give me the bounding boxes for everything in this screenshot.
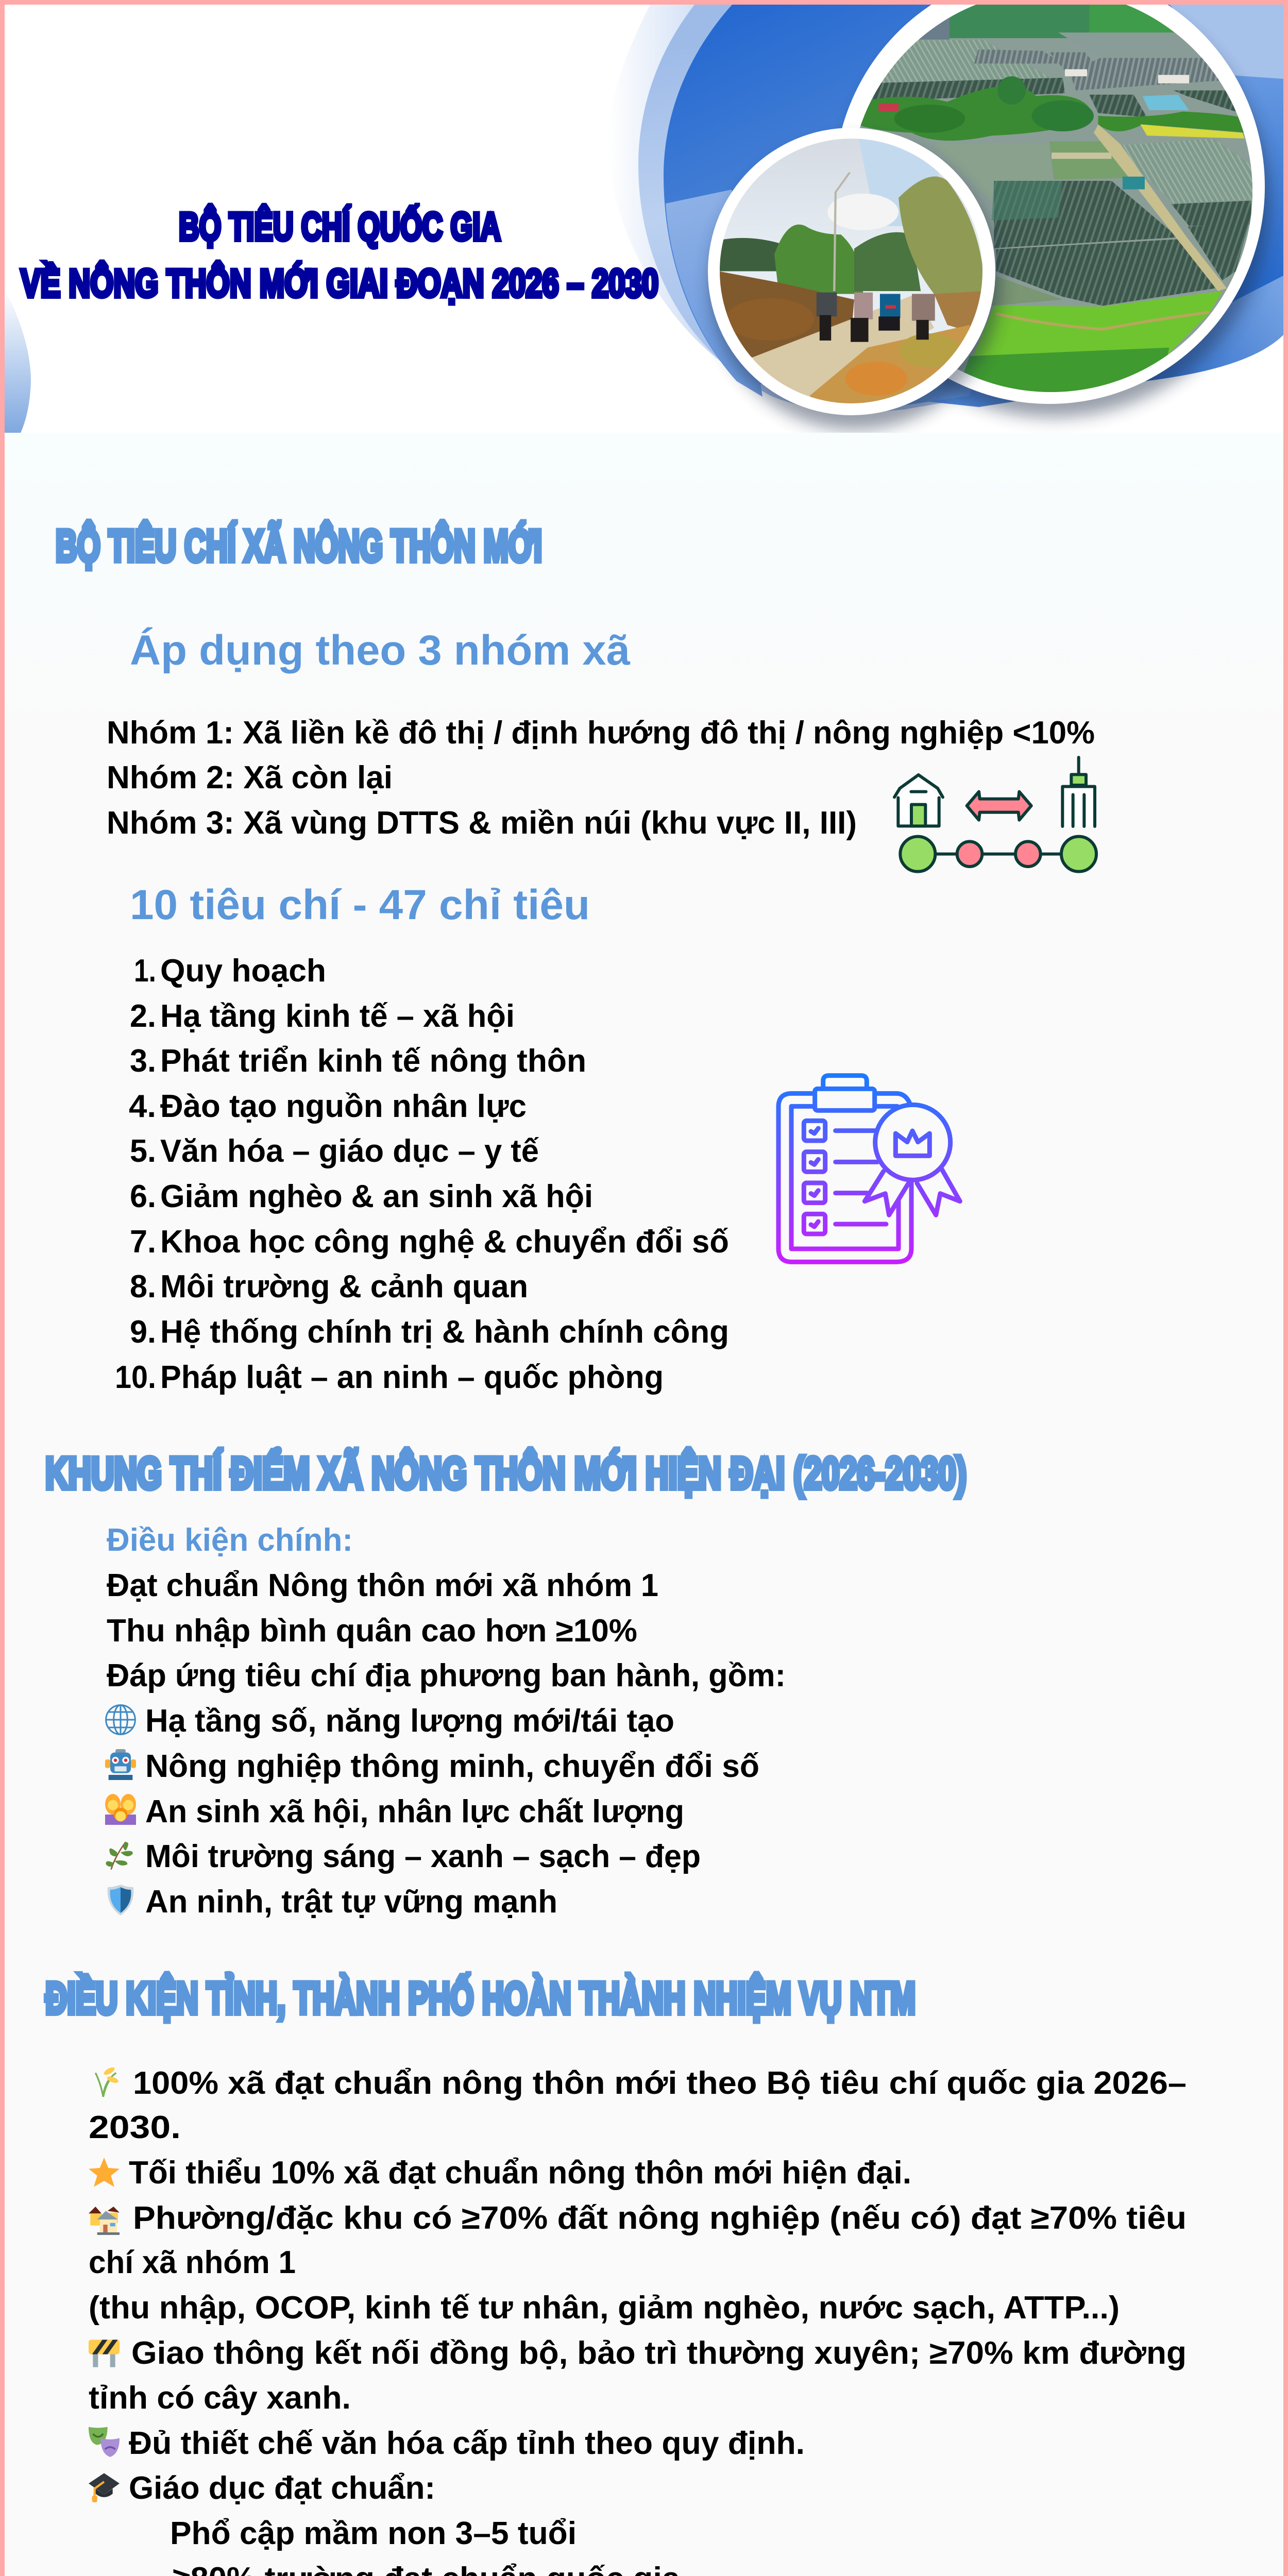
checklist: province completion conditions: chí xã nhóm 1: [89, 2245, 296, 2280]
numbered list: ten criteria: Đào tạo nguồn nhân lực: [160, 1089, 527, 1124]
checklist: province completion conditions: tỉnh có cây xanh.: [89, 2380, 351, 2416]
numbered list: ten criteria: Phát triển kinh tế nông thôn: [160, 1043, 586, 1079]
numbered list: ten criteria: 4.: [129, 1089, 156, 1124]
checklist: province completion conditions: 2030.: [89, 2110, 181, 2145]
text block: pilot conditions: Thu nhập bình quân cao hơn ≥10%: [107, 1613, 637, 1649]
checklist: province completion conditions: (thu nhập, OCOP, kinh tế tư nhân, giảm nghèo, nước sạch, ATTP...): [89, 2290, 1120, 2326]
subheading: main conditions: Điều kiện chính:: [107, 1522, 353, 1558]
big photo frame shadow: [837, 0, 1270, 417]
checklist: province completion conditions: 100% xã đạt chuẩn nông thôn mới theo Bộ tiêu chí quốc gia 2026–: [133, 2065, 1187, 2101]
heading: province conditions: ĐIỀU KIỆN TỈNH, THÀNH PHỐ HOÀN THÀNH NHIỆM VỤ NTM: [45, 1974, 916, 2023]
numbered list: ten criteria: Môi trường & cảnh quan: [160, 1269, 528, 1304]
checklist: local criteria: [105, 1703, 759, 1920]
photo: aerial view of farm fields: [860, 5, 1252, 392]
big photo frame: [834, 0, 1265, 404]
text block: commune groups: Nhóm 2: Xã còn lại: [107, 760, 393, 795]
blue backdrop shapes: [608, 5, 1283, 412]
icon: herb: [106, 1842, 133, 1870]
left corner crescent: [5, 289, 31, 433]
text block: pilot conditions: [107, 1568, 786, 1693]
icon: globe: [106, 1705, 135, 1734]
checklist: local criteria: Nông nghiệp thông minh, chuyển đổi số: [145, 1749, 759, 1784]
numbered list: ten criteria: 6.: [130, 1179, 156, 1214]
checklist: province completion conditions: Phổ cập mầm non 3–5 tuổi: [170, 2516, 577, 2551]
header banner: [5, 0, 1283, 433]
main title: BỘ TIÊU CHÍ QUỐC GIA: [179, 205, 501, 249]
small photo frame: [708, 128, 995, 415]
text block: pilot conditions: Đáp ứng tiêu chí địa phương ban hành, gồm:: [107, 1658, 786, 1693]
icon: shield: [108, 1885, 133, 1916]
icon: checklist with award ribbon: [778, 1076, 960, 1262]
checklist: local criteria: Hạ tầng số, năng lượng mới/tái tạo: [145, 1703, 674, 1739]
numbered list: ten criteria: [115, 953, 729, 1395]
checklist: local criteria: An ninh, trật tự vững mạnh: [145, 1884, 557, 1920]
numbered list: ten criteria: Quy hoạch: [160, 953, 326, 989]
text block: commune groups: Nhóm 1: Xã liền kề đô thị / định hướng đô thị / nông nghiệp <10%: [107, 715, 1095, 751]
checklist: province completion conditions: [89, 2065, 1187, 2576]
numbered list: ten criteria: 3.: [130, 1043, 156, 1079]
checklist: province completion conditions: Đủ thiết chế văn hóa cấp tỉnh theo quy định.: [129, 2426, 805, 2461]
checklist: local criteria: An sinh xã hội, nhân lực chất lượng: [145, 1794, 684, 1829]
numbered list: ten criteria: Hệ thống chính trị & hành chính công: [160, 1314, 729, 1350]
numbered list: ten criteria: 2.: [130, 998, 156, 1034]
small photo frame shadow: [710, 139, 1001, 430]
heading: commune criteria: BỘ TIÊU CHÍ XÃ NÔNG THÔN MỚI: [56, 521, 542, 571]
icon: star: [89, 2158, 120, 2187]
icon: theatre masks: [89, 2427, 120, 2457]
icon: robot: [105, 1749, 136, 1780]
main title: VỀ NÔNG THÔN MỚI GIAI ĐOẠN 2026 – 2030: [21, 262, 658, 306]
icon: family: [105, 1794, 136, 1825]
main title: [21, 205, 658, 306]
icon: road barrier: [89, 2340, 120, 2367]
numbered list: ten criteria: Hạ tầng kinh tế – xã hội: [160, 998, 515, 1034]
numbered list: ten criteria: Văn hóa – giáo dục – y tế: [160, 1133, 539, 1169]
numbered list: ten criteria: 7.: [130, 1224, 156, 1260]
numbered list: ten criteria: 1.: [134, 953, 156, 989]
text block: commune groups: [107, 715, 1095, 841]
numbered list: ten criteria: 8.: [130, 1269, 156, 1304]
numbered list: ten criteria: 10.: [115, 1360, 156, 1395]
checklist: province completion conditions: Tối thiểu 10% xã đạt chuẩn nông thôn mới hiện đại.: [129, 2155, 911, 2191]
numbered list: ten criteria: Khoa học công nghệ & chuyển đổi số: [160, 1224, 729, 1260]
text block: commune groups: Nhóm 3: Xã vùng DTTS & miền núi (khu vực II, III): [107, 805, 857, 841]
photo: villagers walking on a rural road: [717, 135, 992, 407]
checklist: province completion conditions: Giao thông kết nối đồng bộ, bảo trì thường xuyên; ≥70% km đường: [131, 2335, 1187, 2371]
icon: graduation cap: [89, 2473, 120, 2502]
numbered list: ten criteria: 9.: [130, 1314, 156, 1350]
subheading: three groups: Áp dụng theo 3 nhóm xã: [130, 627, 630, 674]
subheading: ten criteria: 10 tiêu chí - 47 chỉ tiêu: [130, 882, 590, 928]
icon: rural to urban link: [894, 757, 1096, 872]
text block: pilot conditions: Đạt chuẩn Nông thôn mới xã nhóm 1: [107, 1568, 658, 1603]
numbered list: ten criteria: Giảm nghèo & an sinh xã hội: [160, 1179, 593, 1214]
checklist: province completion conditions: Giáo dục đạt chuẩn:: [129, 2470, 435, 2506]
icon: rice: [95, 2066, 119, 2097]
numbered list: ten criteria: 5.: [130, 1133, 156, 1169]
checklist: province completion conditions: Phường/đặc khu có ≥70% đất nông nghiệp (nếu có) đạt ≥70% tiêu: [133, 2200, 1187, 2236]
numbered list: ten criteria: Pháp luật – an ninh – quốc phòng: [160, 1360, 664, 1395]
checklist: local criteria: Môi trường sáng – xanh – sạch – đẹp: [145, 1839, 701, 1874]
icon: houses: [89, 2207, 120, 2235]
